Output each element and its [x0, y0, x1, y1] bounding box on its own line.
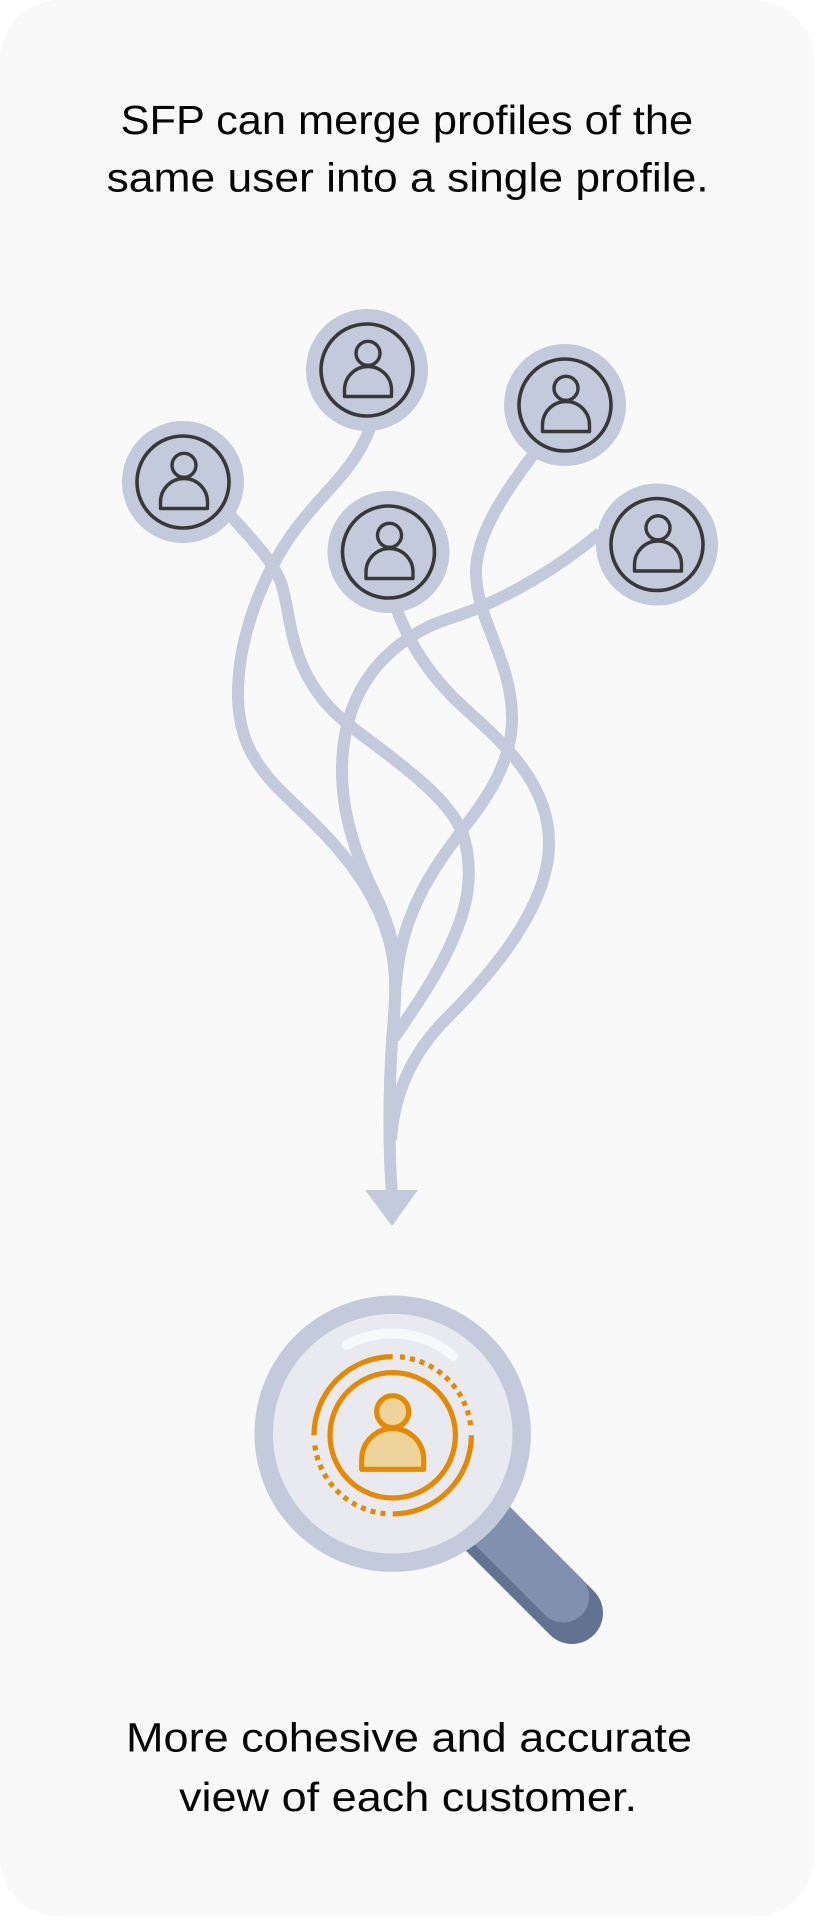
chart: merging profile streams with arrow — [231, 428, 600, 1226]
text: conclusion statement: More cohesive and accurate — [126, 1714, 692, 1760]
icon: magnifying glass with merged profile — [264, 1305, 572, 1613]
heading: merge profiles statement: same user into a single profile. — [107, 154, 709, 200]
stream: right profile — [342, 533, 600, 965]
stream: middle profile — [391, 610, 549, 1140]
heading: merge profiles statement — [107, 97, 709, 200]
icon: profile left — [122, 421, 244, 543]
icon: profile upper right — [504, 344, 626, 466]
magnifier lens — [264, 1305, 522, 1563]
stream: left profile — [231, 516, 469, 1038]
stream: upper right profile — [396, 455, 533, 985]
merged profile person — [362, 1396, 424, 1469]
text: conclusion statement — [126, 1714, 692, 1820]
arrow head — [365, 1190, 418, 1226]
text: conclusion statement: view of each customer. — [179, 1774, 637, 1820]
heading: merge profiles statement: SFP can merge profiles of the — [121, 97, 693, 143]
icon: profile top — [306, 309, 428, 431]
lens highlight — [347, 1334, 453, 1356]
magnifier handle — [393, 1433, 572, 1613]
stream: top profile — [238, 428, 395, 985]
icon: profile right — [596, 484, 718, 606]
merged profile rings — [314, 1357, 471, 1514]
icon: profile middle — [328, 491, 450, 613]
stream: merged trunk — [389, 970, 395, 1195]
